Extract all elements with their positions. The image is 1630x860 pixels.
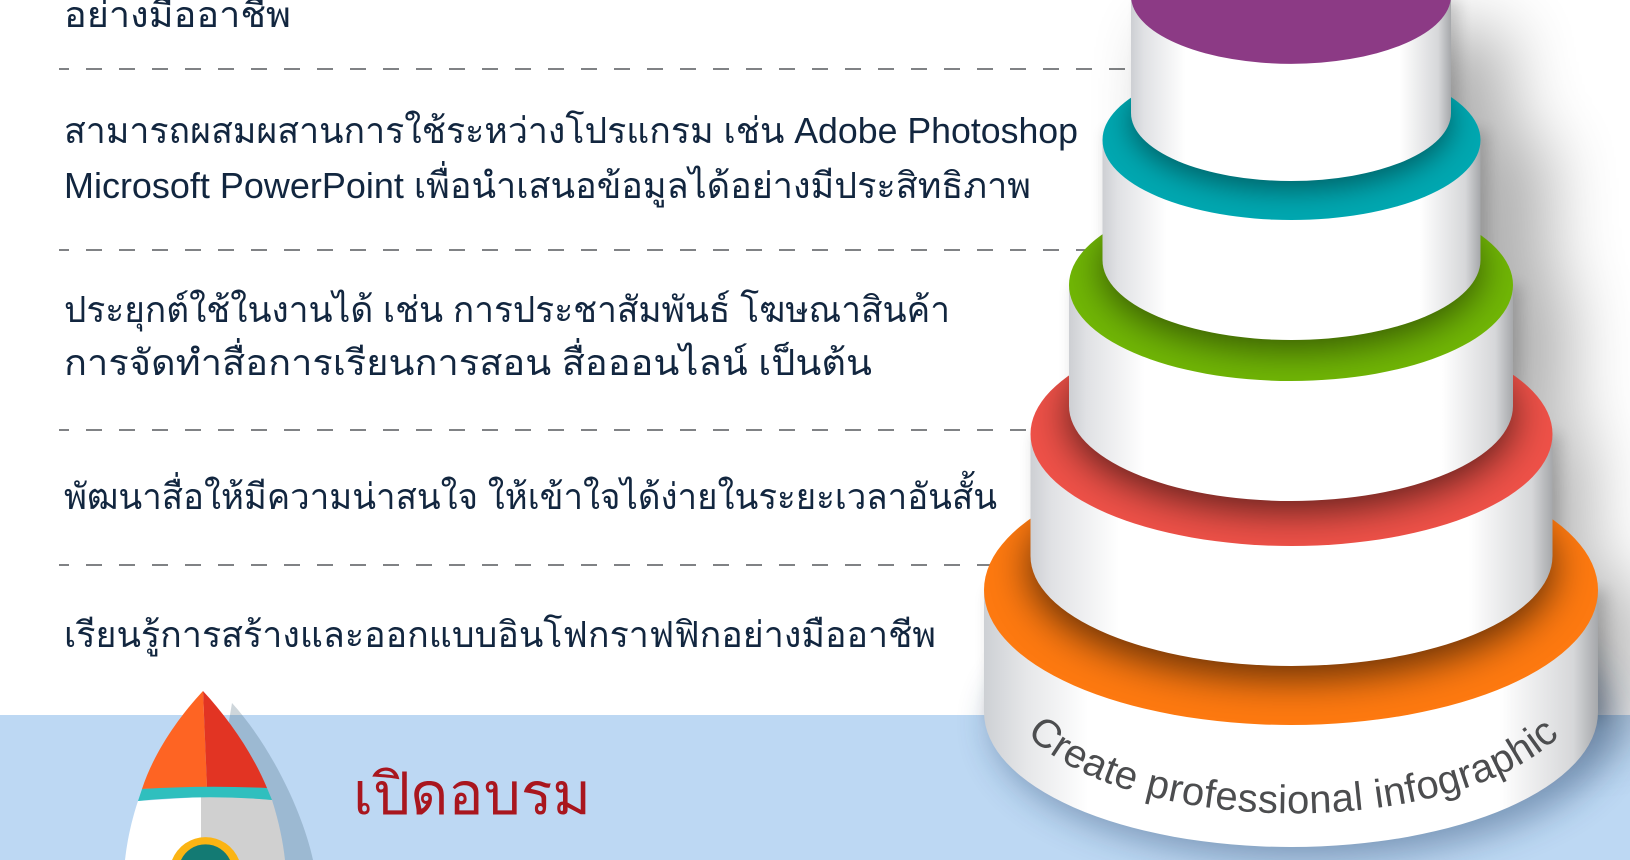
stacked cylinder tower (984, 0, 1598, 847)
orange top (984, 518, 1598, 725)
list item: applications: ประยุกต์ใช้ในงานได้ เช่น การประชาสัมพันธ์ โฆษณาสินค้า (64, 289, 950, 332)
rocket band (138, 787, 272, 801)
blue footer band (0, 715, 1630, 860)
rocket shadow (225, 703, 313, 860)
rocket nose left (142, 691, 207, 789)
label on base: Create professional infographic (1032, 720, 1556, 814)
tier 1: purple (1131, 0, 1451, 181)
list item: learn professionally: เรียนรู้การสร้างและออกแบบอินโฟกราฟฟิกอย่างมืออาชีพ (64, 614, 936, 657)
red top (1030, 374, 1552, 546)
green top inner shade (1102, 189, 1482, 349)
tier 4: red (1030, 374, 1552, 666)
tier 3: green (1069, 234, 1513, 501)
red top inner shade (1068, 321, 1514, 511)
contact shadow next to tower (988, 0, 1606, 720)
orange top inner shade (1030, 458, 1554, 678)
rocket nose right (203, 691, 267, 788)
wide soft shadow (1100, 30, 1630, 730)
tier 2: teal (1102, 97, 1480, 340)
teal top inner shade (1116, 97, 1466, 206)
base body (984, 590, 1598, 847)
purple top (1131, 0, 1451, 64)
rocket body right (201, 797, 285, 860)
list item: combining programs: สามารถผสมผสานการใช้ระหว่างโปรแกรม เช่น Adobe Photoshop (64, 110, 1078, 151)
green top (1069, 234, 1513, 381)
list item: applications (64, 289, 950, 383)
list item: applications: การจัดทำสื่อการเรียนการสอน สื่อออนไลน์ เป็นต้น (64, 338, 872, 383)
rocket window (172, 837, 239, 860)
list text block (64, 0, 1078, 657)
tower shadow (988, 0, 1630, 859)
icon: rocket (125, 691, 313, 860)
heading: open training: เปิดอบรม (353, 762, 591, 827)
purple body (1131, 0, 1451, 181)
tier 5: base with orange top (984, 518, 1598, 847)
rocket body left (125, 797, 201, 860)
teal body (1102, 140, 1480, 340)
red body (1030, 434, 1552, 666)
list item: engaging media: พัฒนาสื่อให้มีความน่าสนใจ ให้เข้าใจได้ง่ายในระยะเวลาอันสั้น (64, 470, 997, 517)
list item: combining programs: Microsoft PowerPoint เพื่อนำเสนอข้อมูลได้อย่างมีประสิทธิภาพ (64, 161, 1031, 208)
teal top (1102, 97, 1480, 220)
shadow beneath base (972, 650, 1630, 860)
list item: combining programs (64, 110, 1078, 208)
green body (1069, 285, 1513, 501)
